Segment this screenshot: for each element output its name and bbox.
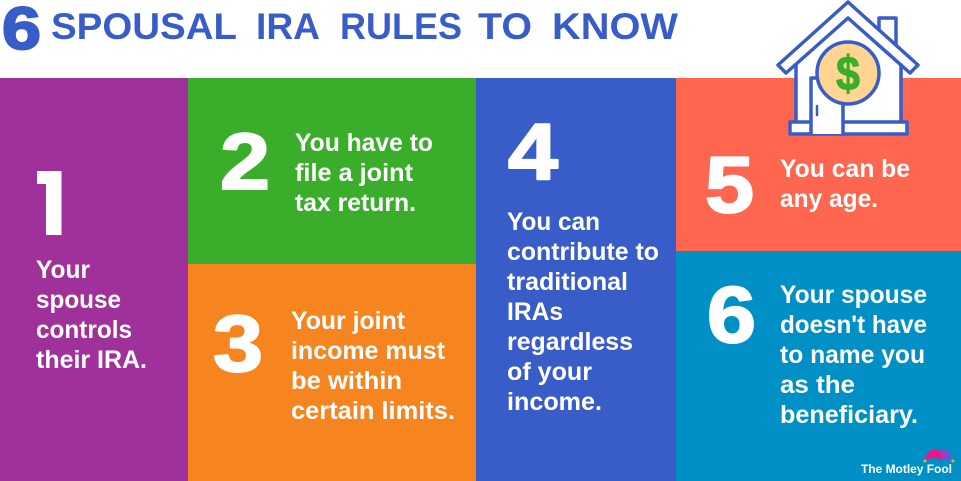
panel: rule 6: Your spouse (780, 281, 927, 309)
panel: rule 5: 5 (705, 140, 754, 229)
panel: rule 4: income. (507, 388, 602, 416)
panel: rule 3: Your joint (291, 307, 406, 335)
panel: rule 4: regardless (507, 328, 633, 356)
panel: rule 5 (676, 78, 961, 251)
panel: rule 1: controls (36, 316, 132, 344)
panel: rule 1: their IRA. (36, 346, 147, 374)
title: IRA (256, 6, 320, 47)
panel: rule 1: spouse (36, 286, 121, 314)
panel: rule 3: 3 (213, 299, 263, 388)
panel: rule 2: tax return. (295, 189, 416, 217)
panel: rule 1: 1 (32, 159, 68, 248)
panel: rule 3: certain limits. (291, 397, 455, 425)
panel: rule 4: You can (507, 208, 600, 236)
title (2, 0, 678, 62)
panel: rule 2 (188, 78, 476, 264)
panel: rule 2: 2 (220, 117, 270, 206)
panel: rule 3: income must (291, 337, 446, 365)
panel: rule 4: 4 (508, 107, 559, 196)
title: KNOW (552, 6, 678, 47)
panel: rule 4: of your (507, 358, 592, 386)
title: RULES (340, 6, 462, 47)
title: TO (478, 6, 532, 47)
panel: rule 1: Your (36, 256, 90, 284)
logo: The Motley Fool (861, 449, 954, 476)
panel: rule 2: file a joint (295, 159, 414, 187)
panel: rule 5: You can be (780, 155, 910, 183)
panel: rule 4 (476, 78, 676, 481)
panel: rule 6: to name you (780, 341, 925, 369)
panel: rule 6: beneficiary. (780, 401, 918, 429)
panel: rule 6: as the (780, 371, 855, 399)
icon: house with dollar coin (778, 2, 918, 134)
panel: rule 6: doesn't have (780, 311, 927, 339)
title: SPOUSAL (51, 6, 237, 47)
panel: rule 3: be within (291, 367, 402, 395)
panel: rule 1 (0, 78, 188, 481)
panel: rule 6 (676, 251, 961, 481)
panel: rule 3 (188, 264, 476, 481)
panel: rule 2: You have to (295, 129, 433, 157)
icon: house with dollar coin: $ (836, 48, 860, 101)
logo: The Motley Fool: The Motley Fool (861, 462, 952, 476)
panel: rule 4: traditional (507, 268, 628, 296)
panel: rule 4: contribute to (507, 238, 659, 266)
panel: rule 4: IRAs (507, 298, 563, 326)
panel: rule 6: 6 (707, 270, 756, 359)
panel: rule 5: any age. (780, 185, 878, 213)
